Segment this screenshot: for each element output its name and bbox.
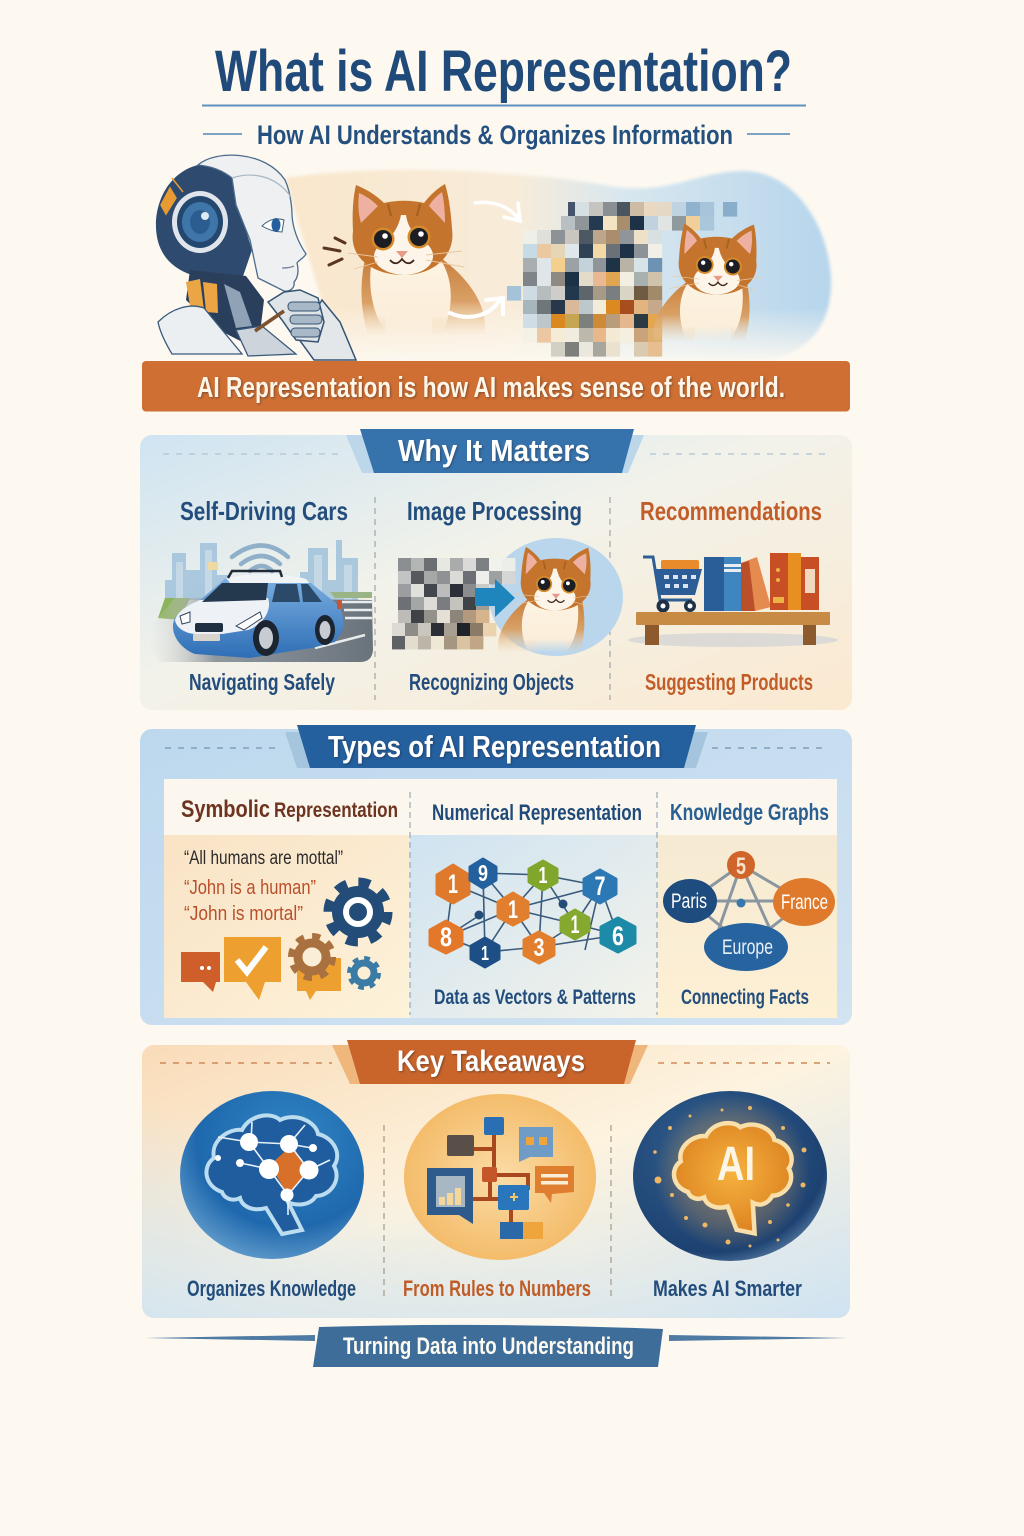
node values: 9 — [478, 860, 488, 886]
heading ribbon: key takeaways: Key Takeaways — [397, 1045, 585, 1078]
hero background blob — [285, 170, 831, 362]
heading ribbon: types: Types of AI Representation — [328, 729, 661, 764]
column: organizes knowledge — [180, 1091, 364, 1301]
icon: robot — [156, 155, 356, 360]
column: recommendations: Recommendations — [640, 496, 822, 526]
title: What is AI Representation? — [215, 39, 792, 104]
chart: knowledge graph: Europe — [722, 936, 773, 959]
column: image processing: Image Processing — [407, 496, 582, 526]
pixel mosaic — [507, 202, 737, 357]
column: symbolic representation: Symbolic — [181, 796, 270, 823]
column: symbolic representation — [181, 796, 398, 1000]
banner: definition: AI Representation is how AI makes sense of the world. — [197, 372, 785, 404]
column: makes AI smarter: Makes AI Smarter — [653, 1276, 802, 1301]
column: symbolic representation: “All humans are mottal” — [184, 848, 343, 869]
icon: glowing AI brain — [633, 1091, 827, 1261]
column: symbolic representation: Representation — [274, 799, 398, 822]
icon: sound ticks — [324, 238, 345, 265]
chart: knowledge graph: France — [781, 891, 828, 914]
column: organizes knowledge: Organizes Knowledge — [187, 1276, 356, 1301]
node values: 1 — [538, 862, 548, 888]
column: numerical representation: Data as Vectors & Patterns — [434, 986, 636, 1009]
node values: 1 — [570, 911, 580, 939]
column: self-driving cars: Self-Driving Cars — [180, 496, 348, 526]
hero illustration — [156, 155, 831, 362]
column: knowledge graphs: Connecting Facts — [681, 986, 809, 1009]
node values: 1 — [508, 896, 518, 924]
column: knowledge graphs — [663, 799, 835, 1009]
icon: cart and books — [628, 553, 838, 647]
sparkles — [653, 1106, 806, 1248]
chart: knowledge graph: 5 — [736, 853, 746, 880]
heading ribbon: key takeaways — [332, 1040, 648, 1084]
column: self-driving cars: Navigating Safely — [189, 669, 335, 695]
column: from rules to numbers — [403, 1094, 596, 1301]
icon: cat beside mosaic — [653, 224, 760, 341]
icon: cat — [348, 184, 485, 334]
chart: number network — [430, 859, 635, 967]
column: self-driving cars — [148, 496, 373, 695]
column: from rules to numbers: From Rules to Numbers — [403, 1276, 591, 1301]
node values: 3 — [534, 934, 544, 962]
footer banner: Turning Data into Understanding — [343, 1333, 634, 1360]
inner card — [164, 779, 837, 1018]
column: knowledge graphs: Knowledge Graphs — [670, 799, 829, 825]
chart: knowledge graph — [663, 851, 835, 971]
infographic: What is AI Representation — [140, 48, 852, 1367]
column: image processing — [392, 496, 623, 695]
column: numerical representation — [430, 800, 642, 1009]
panel: key takeaways — [142, 1040, 850, 1318]
icon: network brain — [180, 1091, 364, 1259]
node values: 6 — [612, 921, 624, 951]
chart: knowledge graph: Paris — [671, 890, 707, 913]
node values: 1 — [481, 943, 489, 965]
heading ribbon: why it matters: Why It Matters — [398, 433, 590, 468]
subtitle: How AI Understands & Organizes Information — [257, 120, 733, 150]
panel: types of AI representation — [140, 725, 852, 1025]
icon: speech bubbles and gears — [181, 937, 378, 1000]
column: recommendations: Suggesting Products — [645, 669, 813, 695]
column: symbolic representation: “John is a human” — [184, 877, 316, 899]
heading ribbon: why it matters — [346, 429, 644, 473]
column: numerical representation: Numerical Representation — [432, 800, 642, 825]
icon: large gear — [329, 883, 387, 941]
arrow: upper curved — [475, 202, 520, 221]
panel: why it matters — [140, 429, 852, 710]
icon: glowing AI brain: AI — [717, 1138, 755, 1191]
node values: 8 — [440, 922, 452, 952]
column: image processing: Recognizing Objects — [409, 669, 574, 695]
arrow: lower curved — [450, 298, 503, 317]
banner: definition — [142, 361, 850, 412]
column: recommendations — [628, 496, 838, 695]
icon: mosaic to cat — [392, 538, 623, 656]
icon: car scene — [148, 540, 373, 662]
column: makes AI smarter — [633, 1091, 827, 1301]
footer banner — [145, 1325, 848, 1367]
node values — [430, 859, 635, 967]
node values: 7 — [594, 871, 606, 901]
icon: flowchart — [404, 1094, 596, 1260]
node values: 1 — [448, 869, 458, 899]
column: symbolic representation: “John is mortal” — [184, 903, 303, 925]
